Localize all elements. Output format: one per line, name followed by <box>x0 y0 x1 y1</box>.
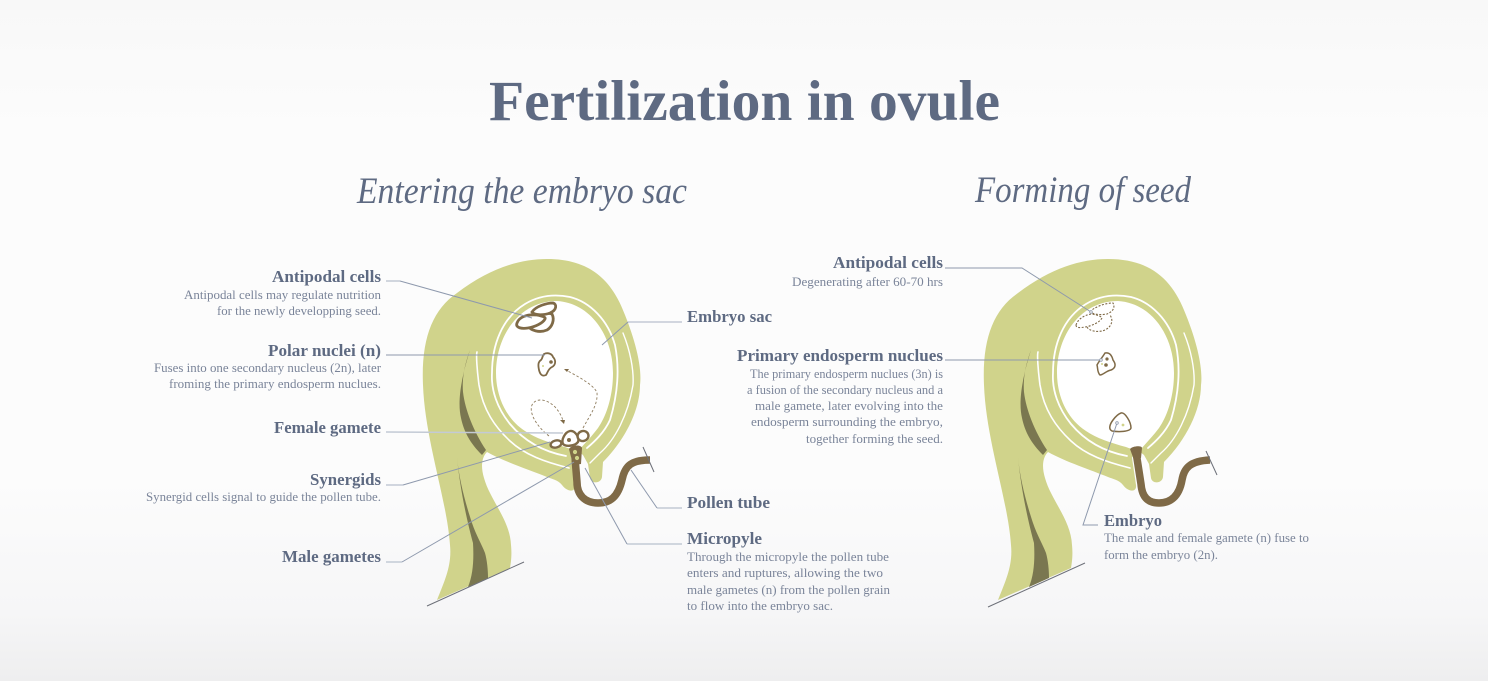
label: polar nuclei <box>154 341 382 391</box>
label: pollen tube: Pollen tube <box>687 493 770 512</box>
label: micropyle <box>687 529 891 613</box>
polar nuclei <box>538 353 555 376</box>
label: polar nuclei: froming the primary endosperm nuclues. <box>169 377 381 391</box>
label: micropyle: Through the micropyle the pollen tube <box>687 550 889 564</box>
label: embryo: Embryo <box>1104 511 1162 530</box>
label: antipodal cells (seed): Degenerating after 60-70 hrs <box>792 275 943 289</box>
label: synergids <box>146 470 381 504</box>
leader lines: left diagram <box>386 281 682 562</box>
label: male gametes: Male gametes <box>282 547 381 566</box>
dashed arrow: loop to female gamete <box>531 400 563 436</box>
leader lines: right diagram <box>945 268 1118 525</box>
pollen tube <box>575 458 650 503</box>
label: synergids: Synergids <box>310 470 381 489</box>
label: female gamete: Female gamete <box>274 418 381 437</box>
stalk cut line <box>988 563 1085 607</box>
antipodal cells <box>517 303 556 331</box>
label: antipodal cells: Antipodal cells may regulate nutrition <box>184 288 382 302</box>
synergids <box>550 430 590 449</box>
label: primary endosperm nucleus: together forming the seed. <box>806 432 943 446</box>
heading: entering the embryo sac: Entering the embryo sac <box>356 171 688 212</box>
label: micropyle: enters and ruptures, allowing the two <box>687 566 883 580</box>
pollen tube <box>1136 452 1210 503</box>
arrowhead <box>560 420 565 424</box>
label: antipodal cells: for the newly developping seed. <box>217 304 381 318</box>
arrowhead <box>564 369 569 372</box>
label: embryo: form the embryo (2n). <box>1104 548 1218 562</box>
label: antipodal cells <box>184 267 382 318</box>
ovule body <box>984 259 1201 600</box>
label: synergids: Synergid cells signal to guide the pollen tube. <box>146 490 381 504</box>
diagram: entering the embryo sac <box>423 259 654 606</box>
degenerating antipodal cells <box>1076 303 1114 331</box>
label: antipodal cells: Antipodal cells <box>272 267 381 286</box>
diagram: forming of seed <box>984 259 1217 607</box>
label: primary endosperm nucleus <box>737 346 943 446</box>
female gamete <box>562 431 578 446</box>
dashed arrow: to polar nuclei <box>566 370 597 428</box>
tube cut line <box>643 447 654 472</box>
label: primary endosperm nucleus: a fusion of the secondary nucleus and a <box>747 383 943 397</box>
label: primary endosperm nucleus: endosperm surrounding the embryo, <box>751 415 943 429</box>
ovule body <box>423 259 640 600</box>
label: primary endosperm nucleus: The primary endosperm nuclues (3n) is <box>750 367 943 381</box>
label: polar nuclei: Fuses into one secondary nucleus (2n), later <box>154 361 382 375</box>
label: micropyle: Micropyle <box>687 529 762 548</box>
embryo cell <box>1110 413 1131 432</box>
stalk cut line <box>427 562 524 606</box>
label: primary endosperm nucleus: male gamete, later evolving into the <box>755 399 943 413</box>
label: primary endosperm nucleus: Primary endosperm nuclues <box>737 346 943 365</box>
primary endosperm nucleus <box>1097 353 1115 375</box>
tube cut line <box>1206 451 1217 475</box>
tube head <box>1130 446 1142 460</box>
label: micropyle: male gametes (n) from the pollen grain <box>687 583 891 597</box>
male gametes in tube head <box>569 445 582 465</box>
label: embryo <box>1104 511 1309 562</box>
title: Fertilization in ovule <box>489 70 1000 133</box>
heading: forming of seed: Forming of seed <box>974 170 1191 211</box>
label: antipodal cells (seed): Antipodal cells <box>833 253 943 272</box>
label: polar nuclei: Polar nuclei (n) <box>268 341 381 360</box>
label: micropyle: to flow into the embryo sac. <box>687 599 833 613</box>
label: embryo sac: Embryo sac <box>687 307 772 326</box>
label: antipodal cells (seed) <box>792 253 943 289</box>
label: embryo: The male and female gamete (n) fuse to <box>1104 531 1309 545</box>
